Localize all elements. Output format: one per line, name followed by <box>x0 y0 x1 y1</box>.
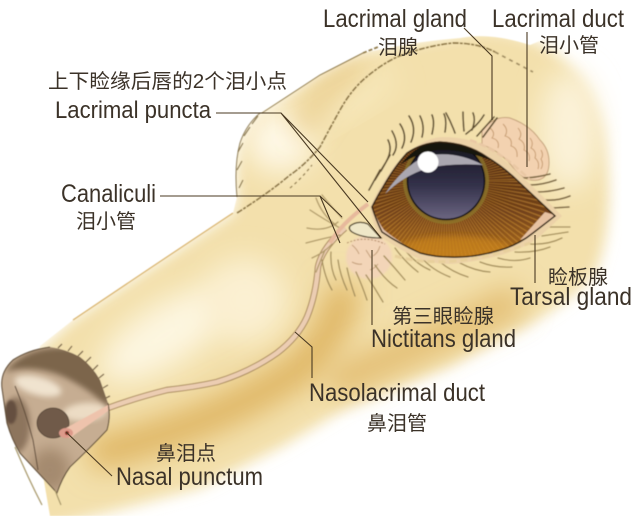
nasolacrimal duct <box>108 228 345 408</box>
leader: nictitans gland <box>371 250 373 325</box>
eye <box>370 137 562 264</box>
label: lacrimal gland: Lacrimal gland <box>323 5 467 33</box>
label: nictitans gland <box>371 305 516 353</box>
label: canaliculi <box>61 180 156 233</box>
label: tarsal gland <box>510 266 632 311</box>
upper eyelashes <box>369 112 570 208</box>
leader: nasolacrimal duct <box>295 332 312 378</box>
label: nasolacrimal duct <box>309 379 485 435</box>
highlight <box>418 152 438 172</box>
label: nasal punctum <box>116 442 263 491</box>
pupil <box>408 142 484 220</box>
label: nasolacrimal duct: Nasolacrimal duct <box>309 379 485 407</box>
label: lacrimal gland: 泪腺 <box>378 36 418 59</box>
leader: canaliculi <box>160 196 342 243</box>
label: lacrimal puncta <box>48 70 287 124</box>
leader: lacrimal gland <box>464 28 492 120</box>
leader: lacrimal duct <box>526 32 528 167</box>
label: lacrimal puncta: 上下睑缘后唇的2个泪小点 <box>48 70 287 93</box>
label: nasal punctum: Nasal punctum <box>116 463 263 491</box>
label: nictitans gland: Nictitans gland <box>371 325 516 353</box>
eye outline <box>372 142 555 257</box>
lacrimal gland <box>482 118 549 180</box>
forehead fold dashes <box>73 43 533 320</box>
reflection crescent <box>385 154 483 194</box>
label: canaliculi: Canaliculi <box>61 180 156 208</box>
label: tarsal gland: 睑板腺 <box>548 266 608 289</box>
label: lacrimal duct <box>492 5 624 57</box>
leader lines <box>66 28 535 476</box>
leader: lacrimal puncta <box>216 113 381 238</box>
lacrimal caruncle <box>330 204 381 243</box>
upper dark band <box>400 142 490 165</box>
label: nictitans gland: 第三眼睑腺 <box>392 305 494 328</box>
label: nasolacrimal duct: 鼻泪管 <box>367 412 427 435</box>
nose <box>0 340 115 505</box>
label: lacrimal duct: Lacrimal duct <box>492 5 624 33</box>
nasal punctum opening <box>59 428 73 438</box>
nostril <box>37 408 69 438</box>
third eyelid edge <box>376 216 404 244</box>
label: lacrimal puncta: Lacrimal puncta <box>55 97 212 124</box>
lower and medial eyelid hairs <box>306 195 570 302</box>
label: nasal punctum: 鼻泪点 <box>156 442 216 465</box>
label: canaliculi: 泪小管 <box>76 210 136 233</box>
label: lacrimal duct: 泪小管 <box>539 34 599 57</box>
leader: nasal punctum <box>66 432 112 476</box>
corner membrane <box>520 212 558 240</box>
eyelid rim <box>370 137 562 264</box>
third eyelid gland <box>346 235 392 279</box>
label: lacrimal gland <box>323 5 467 59</box>
leader: tarsal gland <box>534 235 536 283</box>
